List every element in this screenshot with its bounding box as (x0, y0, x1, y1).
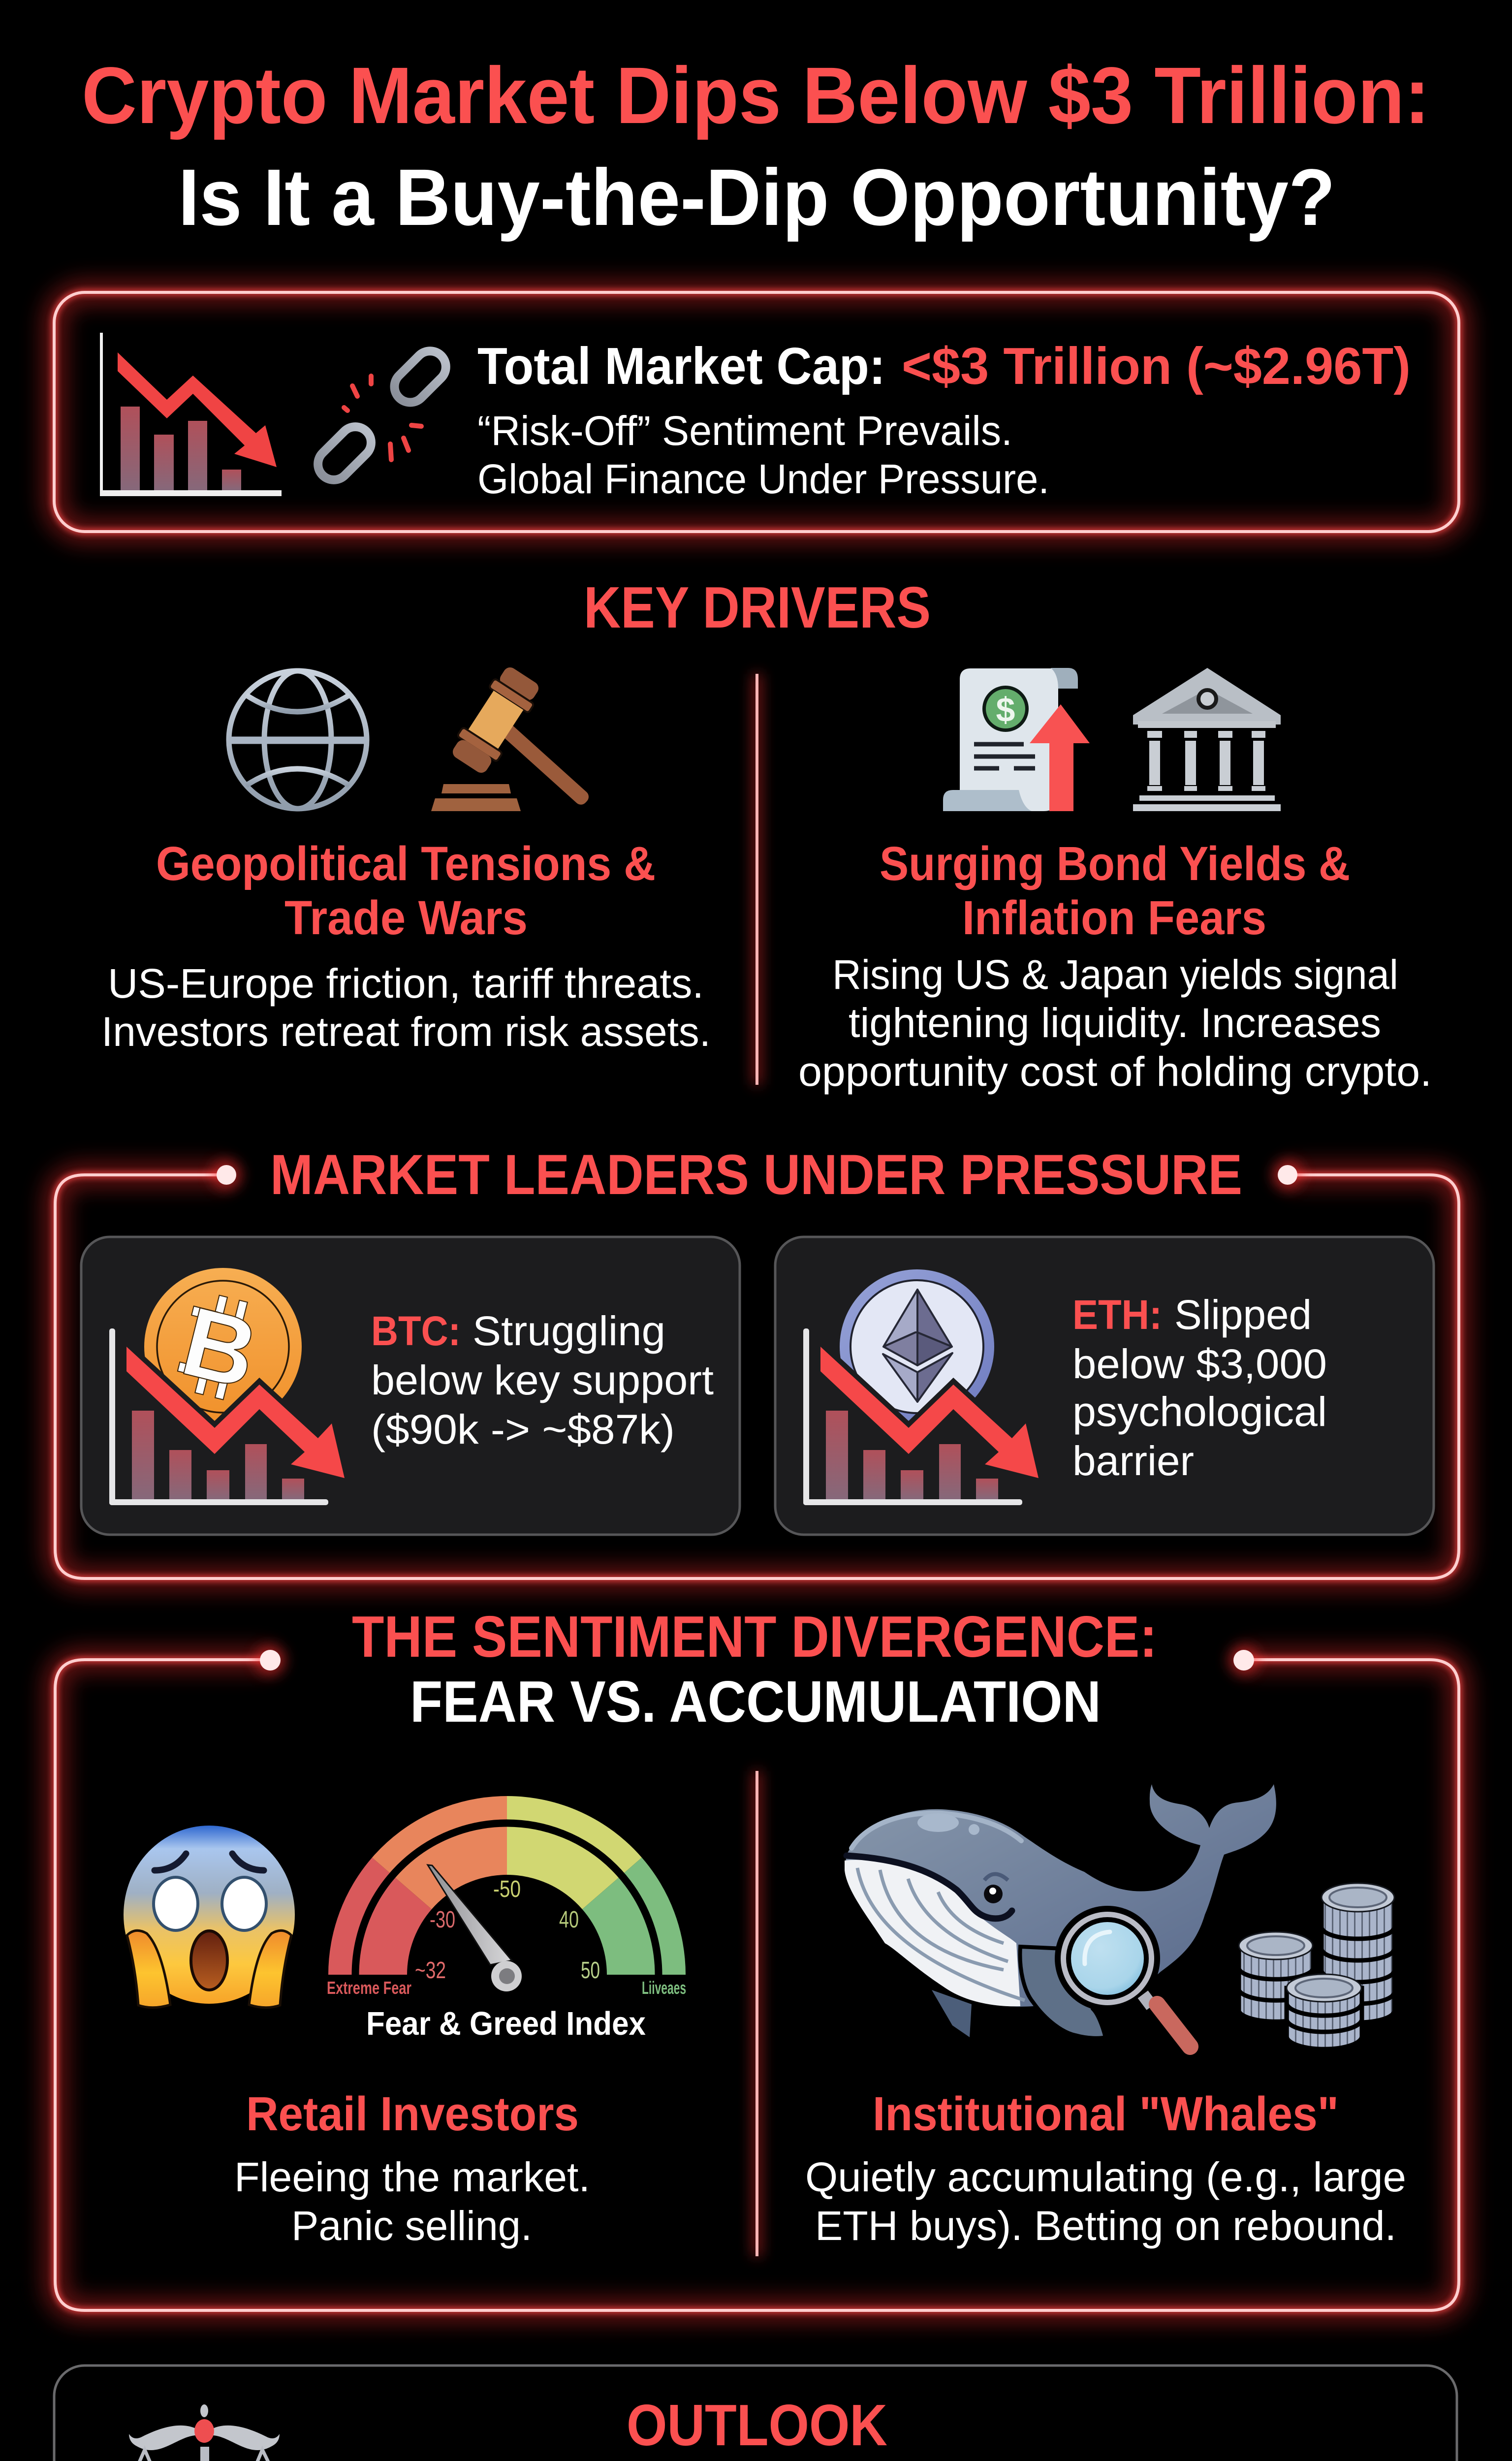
text: institutional whales: ETH buys). Betting on rebound. (815, 2203, 1396, 2249)
text: institutional whales: Quietly accumulating (e.g., large (805, 2154, 1406, 2200)
text: BTC (371, 1308, 714, 1452)
panel: market leaders (55, 1143, 1459, 1578)
icon: gavel (431, 663, 591, 811)
panel: outlook (54, 2366, 1457, 2461)
text: bond yields: tightening liquidity. Increases (849, 1000, 1381, 1046)
chart: fear and greed gauge: 40 (559, 1907, 579, 1933)
icon: balance scale (113, 2404, 296, 2461)
icon: bond document with rising arrow: $ (996, 691, 1015, 729)
text: BTC: BTC: (371, 1308, 461, 1354)
icon: bitcoin coin and falling chart (109, 1268, 345, 1505)
title: Is It a Buy-the-Dip Opportunity? (178, 152, 1335, 242)
title (82, 50, 1430, 242)
label: fear and greed index: Fear & Greed Index (366, 2005, 646, 2042)
icon: broken chain (312, 345, 452, 486)
text: market cap: “Risk-Off” Sentiment Prevails. (477, 408, 1012, 454)
card: BTC (81, 1237, 740, 1535)
heading: market leaders: MARKET LEADERS UNDER PRESSURE (270, 1143, 1242, 1206)
icon: falling chart (100, 333, 282, 496)
text: ETH: ETH: (1072, 1292, 1162, 1338)
text: retail investors: Fleeing the market. (234, 2154, 590, 2200)
text: ETH: barrier (1072, 1438, 1194, 1484)
panel: key drivers (101, 663, 1432, 1095)
chart: fear and greed gauge (327, 1796, 686, 2042)
panel: total market cap (54, 292, 1459, 532)
title: Crypto Market Dips Below $3 Trillion: (82, 50, 1430, 140)
heading: outlook: OUTLOOK (627, 2393, 887, 2458)
text: BTC: ($90k -> ~$87k) (371, 1406, 675, 1452)
icon: coin stacks (1239, 1883, 1394, 2049)
text: market cap: <$3 Trillion (~$2.96T) (902, 337, 1411, 395)
text: institutional whales: Institutional "Whales" (873, 2087, 1339, 2141)
text: geopolitical tensions: Geopolitical Tensions & (156, 837, 656, 890)
text: BTC: below key support (371, 1357, 714, 1403)
text: market cap: Global Finance Under Pressure. (477, 456, 1049, 502)
text: geopolitical tensions: US-Europe friction, tariff threats. (108, 960, 704, 1007)
text: retail investors (234, 2087, 590, 2249)
icon: central bank (1133, 668, 1281, 811)
text: geopolitical tensions: Investors retreat from risk assets. (101, 1009, 711, 1055)
text: bond yields: Surging Bond Yields & (880, 837, 1350, 890)
chart: fear and greed gauge: Extreme Fear (327, 1978, 411, 1998)
text: market cap (477, 337, 1411, 502)
text: ETH: below $3,000 (1072, 1341, 1327, 1387)
heading: sentiment divergence (352, 1604, 1157, 1735)
chart: fear and greed gauge: -50 (493, 1876, 521, 1902)
chart: fear and greed gauge: 50 (581, 1957, 600, 1984)
text: ETH: Slipped (1174, 1292, 1312, 1338)
chart: fear and greed gauge: Liiveaes (642, 1978, 686, 1998)
icon: bond document with rising arrow (943, 668, 1090, 811)
text: geopolitical tensions: Trade Wars (284, 891, 528, 945)
text: bond yields: Rising US & Japan yields signal (832, 951, 1398, 998)
text: ETH (1072, 1292, 1327, 1484)
card: ETH (775, 1237, 1434, 1535)
text: geopolitical tensions (101, 837, 711, 1055)
text: retail investors: Panic selling. (291, 2203, 532, 2249)
icon: bitcoin coin and falling chart: B (172, 1286, 268, 1410)
text: ETH: psychological (1072, 1388, 1327, 1435)
icon: whale with magnifier (845, 1784, 1276, 2047)
heading: sentiment divergence: FEAR VS. ACCUMULATION (410, 1669, 1101, 1735)
heading: sentiment divergence: THE SENTIMENT DIVERGENCE: (352, 1604, 1157, 1670)
text: institutional whales (805, 2087, 1406, 2249)
text: market cap: Total Market Cap: (477, 337, 885, 395)
chart: fear and greed gauge: -30 (430, 1907, 455, 1933)
icon: globe (229, 671, 367, 809)
heading: key drivers: KEY DRIVERS (584, 575, 931, 640)
text: bond yields (798, 837, 1432, 1095)
text: BTC: Struggling (472, 1308, 665, 1354)
text: bond yields: Inflation Fears (962, 891, 1266, 945)
icon: screaming face (124, 1826, 295, 2008)
text: bond yields: opportunity cost of holding crypto. (798, 1048, 1432, 1095)
text: retail investors: Retail Investors (246, 2087, 579, 2141)
icon: ethereum coin and falling chart (803, 1269, 1039, 1505)
chart: fear and greed gauge: ~32 (415, 1957, 446, 1984)
panel: sentiment divergence (55, 1604, 1459, 2310)
